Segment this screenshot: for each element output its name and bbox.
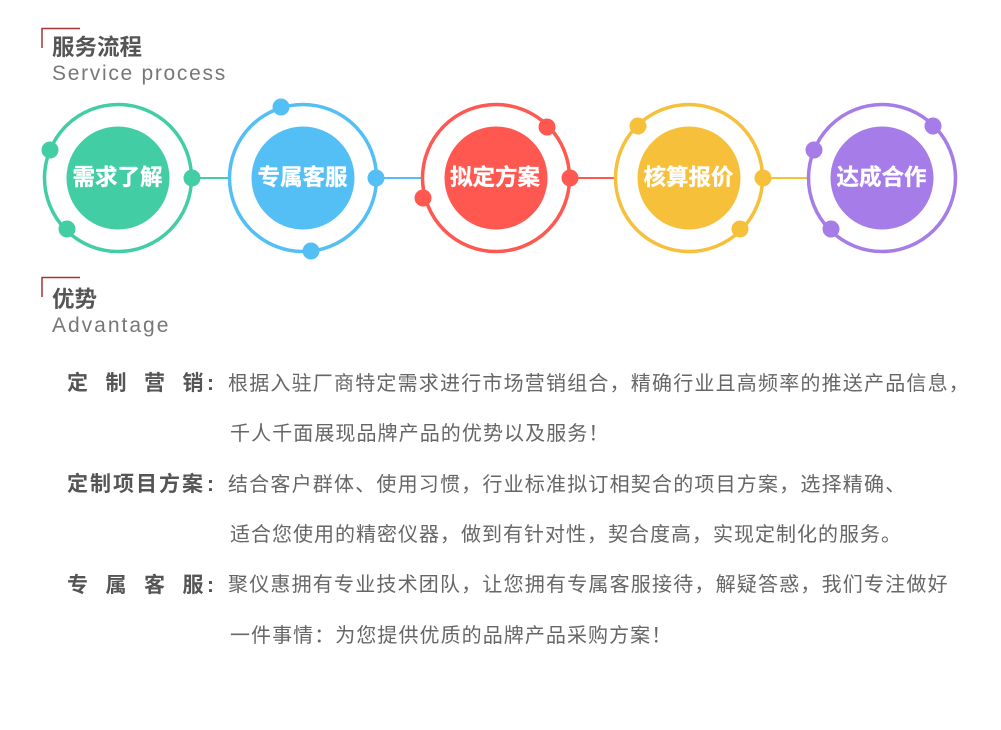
advantage: dedicated service: : xyxy=(207,574,214,597)
advantage: dedicated service xyxy=(67,573,949,647)
step 5: 达成合作 xyxy=(806,104,956,252)
step 5: 达成合作: 达成合作 xyxy=(836,165,927,190)
advantage: custom marketing xyxy=(67,371,970,445)
advantage: custom project plan: 定制项目方案 xyxy=(67,472,205,496)
heading: service process xyxy=(42,28,227,85)
heading: advantage: 优势 xyxy=(52,287,97,312)
connector: step 4 to 5 xyxy=(763,177,809,179)
step 1: 需求了解 xyxy=(42,104,200,252)
advantage: custom marketing: : xyxy=(207,372,214,395)
heading: advantage: Advantage xyxy=(52,314,170,337)
step 2: 专属客服 xyxy=(230,98,384,260)
advantage: custom marketing: 根据入驻厂商特定需求进行市场营销组合，精确行业且高频率的推送产品信息， xyxy=(228,372,970,395)
heading: service process: Service process xyxy=(52,62,227,85)
step 3: 拟定方案: 拟定方案 xyxy=(450,164,540,190)
step 3: 拟定方案 xyxy=(414,104,578,252)
advantage: dedicated service: 专属客服 xyxy=(67,573,221,597)
advantage: custom project plan: : xyxy=(207,473,214,496)
advantage: custom project plan: 结合客户群体、使用习惯，行业标准拟订相契合的项目方案，选择精确、 xyxy=(228,473,906,496)
connector: step 1 to 2 xyxy=(192,177,230,179)
step 2: 专属客服: 专属客服 xyxy=(257,164,348,190)
advantage: custom project plan xyxy=(67,472,906,546)
step 4: 核算报价 xyxy=(616,104,772,252)
advantage: custom project plan: 适合您使用的精密仪器，做到有针对性，契合度高，实现定制化的服务。 xyxy=(230,523,902,546)
step 1: 需求了解: 需求了解 xyxy=(72,165,163,190)
advantage: dedicated service: 聚仪惠拥有专业技术团队，让您拥有专属客服接待，解疑答惑，我们专注做好 xyxy=(228,573,949,596)
step 4: 核算报价: 核算报价 xyxy=(643,165,734,190)
advantage: custom marketing: 定制营销 xyxy=(67,371,221,395)
advantage: custom marketing: 千人千面展现品牌产品的优势以及服务！ xyxy=(230,422,609,445)
heading: advantage xyxy=(42,278,170,337)
advantage: dedicated service: 一件事情：为您提供优质的品牌产品采购方案！ xyxy=(230,624,672,647)
heading: service process: 服务流程 xyxy=(52,35,142,60)
connector: step 2 to 3 xyxy=(376,177,423,179)
connector: step 3 to 4 xyxy=(570,177,616,179)
